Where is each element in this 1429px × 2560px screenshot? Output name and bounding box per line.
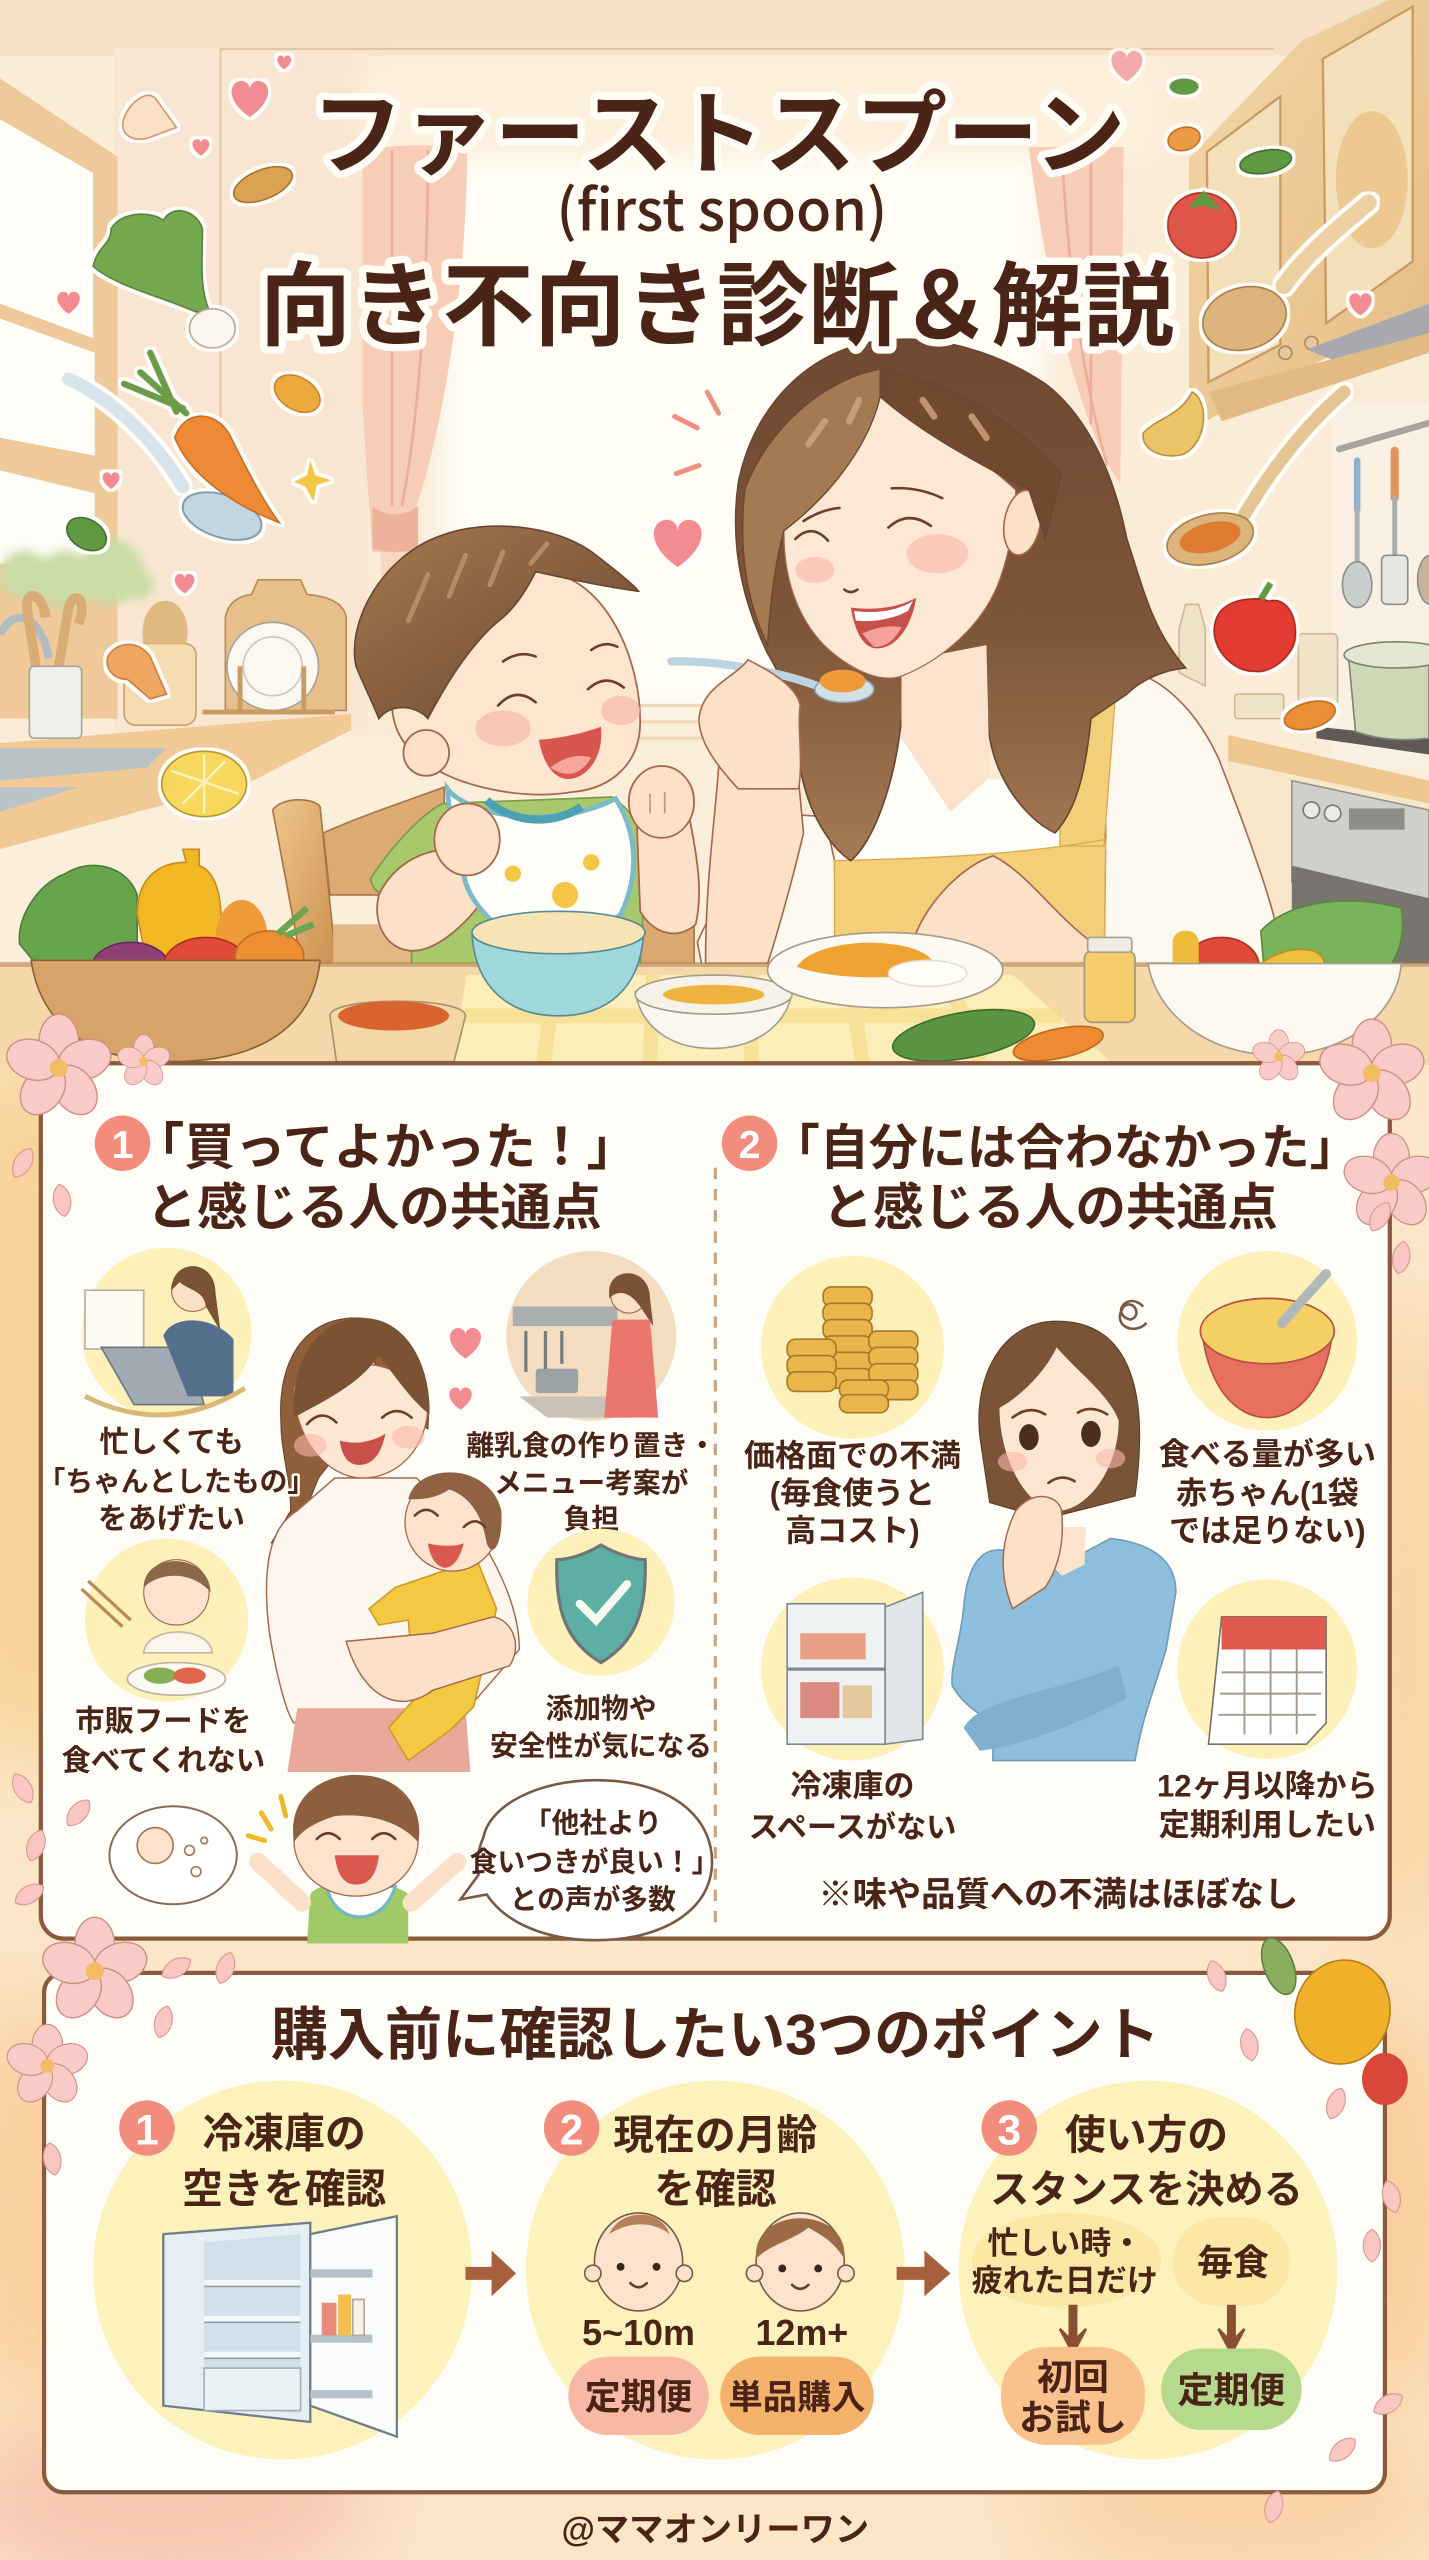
- speech bubble: 「他社より: [524, 1807, 662, 1838]
- baby body: [371, 766, 699, 967]
- mother face: [743, 369, 1062, 678]
- title line: 向き不向き診断＆解説: 向き不向き診断＆解説: [260, 256, 1174, 358]
- item: busy parent: 「ちゃんとしたもの」: [38, 1466, 315, 1497]
- hearts: [449, 1328, 481, 1410]
- item: freezer space: スペースがない: [749, 1809, 956, 1844]
- illustration: mother holding baby: [266, 1318, 519, 1772]
- title line: ファーストスプーン: ファーストスプーン: [312, 85, 1125, 187]
- step badge: [982, 2100, 1037, 2156]
- item: meal prep burden: [466, 1251, 716, 1535]
- panel: common traits: [38, 1063, 1390, 1943]
- panel: three points: [44, 1973, 1385, 2492]
- item: calendar: 12ヶ月以降から: [1157, 1768, 1378, 1803]
- floating foods and spoons: [57, 51, 1372, 817]
- mother skirt: [287, 1708, 470, 1772]
- step circle: [93, 2081, 472, 2460]
- step 2: [526, 2081, 905, 2460]
- item: meal prep burden: メニュー考案が: [494, 1468, 689, 1499]
- footer handle: @ママオンリーワン: [561, 2511, 869, 2549]
- icon: open fridge: [163, 2216, 397, 2437]
- icon: green bean: [61, 511, 112, 557]
- counter jars: [27, 596, 196, 738]
- baby head: [354, 526, 640, 795]
- speech bubble: 食いつきが良い！」: [470, 1847, 719, 1878]
- arrow down left: [1060, 2306, 1086, 2353]
- item: calendar: 定期利用したい: [1159, 1808, 1376, 1843]
- item: busy parent: [38, 1248, 315, 1536]
- item: busy parent: 忙しくても: [99, 1426, 244, 1459]
- icon: star sparkle: [294, 461, 332, 501]
- item: price: (毎食使うと: [770, 1476, 935, 1511]
- icon: sprig shape: [123, 95, 176, 139]
- kitchen illustration: [0, 0, 1429, 1070]
- outcome: subscription: 定期便: [1178, 2369, 1285, 2410]
- step badge: [544, 2100, 599, 2156]
- mother apron: [835, 661, 1117, 967]
- step heading: 空きを確認: [182, 2166, 386, 2212]
- icon: sparkle marks: [674, 392, 719, 474]
- icon: wooden spoon one: [1195, 203, 1369, 359]
- woman face: [998, 1347, 1125, 1576]
- woman crossed arm: [964, 1666, 1127, 1751]
- shelf items right: [1179, 604, 1429, 980]
- mother: [671, 339, 1282, 967]
- arrow step 1 to 2: [465, 2250, 516, 2296]
- held baby: [369, 1472, 502, 1761]
- step heading: 使い方の: [1065, 2112, 1228, 2158]
- hanging utensils: [1339, 423, 1429, 608]
- item: calendar: [1157, 1579, 1378, 1843]
- item: price: [744, 1256, 961, 1549]
- pill: single purchase: [720, 2357, 874, 2435]
- heading: と感じる人の共通点: [822, 1179, 1278, 1236]
- age labels: [582, 2312, 848, 2353]
- item: freezer space: 冷凍庫の: [790, 1768, 915, 1803]
- icon: potato: [229, 159, 297, 210]
- outcome: trial: [1001, 2347, 1145, 2445]
- speech bubble: との声が多数: [510, 1884, 676, 1915]
- step heading: スタンスを決める: [990, 2169, 1303, 2212]
- cutting board and plate rack: [203, 580, 346, 712]
- icon: orange chunk: [1281, 696, 1338, 735]
- icon: radish: [93, 211, 235, 348]
- heading: 「買ってよかった！」: [134, 1118, 637, 1175]
- step badge: [119, 2100, 175, 2156]
- option: busy days: 疲れた日だけ: [972, 2263, 1158, 2298]
- item: price: 価格面での不満: [744, 1439, 961, 1474]
- heading: と感じる人の共通点: [146, 1179, 602, 1236]
- step 1: [93, 2081, 472, 2460]
- option: busy days: [972, 2213, 1161, 2308]
- option: busy days: 忙しい時・: [987, 2226, 1142, 2261]
- heading: [771, 1121, 1359, 1236]
- woman hand at chin: [1003, 1497, 1062, 1609]
- mother second hand: [916, 856, 1127, 967]
- left column: happy buyers: [38, 1115, 719, 1943]
- number badge 1: 1: [112, 1124, 133, 1167]
- potted herbs: [0, 539, 154, 609]
- icon: blue spoon: [69, 379, 267, 549]
- note: ※味や品質への不満はほぼなし: [818, 1876, 1298, 1914]
- icon: leaf: [1238, 146, 1293, 178]
- icon: green sprig: [1169, 78, 1199, 95]
- step 3: [959, 2081, 1338, 2460]
- icon: young baby face: [585, 2213, 692, 2311]
- item: large appetite: 赤ちゃん(1袋: [1176, 1476, 1359, 1511]
- mother arm: [346, 1617, 515, 1701]
- woman hair: [979, 1321, 1140, 1519]
- right column: not a fit: [722, 1115, 1378, 1914]
- item: meal prep burden: 離乳食の作り置き・: [466, 1430, 716, 1461]
- flowers: [1, 1014, 1429, 2109]
- item: safety shield: 安全性が気になる: [490, 1731, 712, 1762]
- step heading: [182, 2111, 386, 2212]
- icon: lemon: [162, 751, 247, 817]
- option: every meal: [1173, 2218, 1290, 2306]
- mother body: [266, 1478, 519, 1723]
- curry plate: [768, 933, 1003, 1008]
- step badge: 3: [997, 2106, 1021, 2153]
- icon: tomato: [1362, 2053, 1408, 2105]
- icon: wooden spoon two: [1161, 392, 1344, 573]
- thought bubble: [109, 1806, 237, 1904]
- left vegetable bowl: [19, 849, 320, 1062]
- left counter and sink: [0, 618, 351, 967]
- icon: carrot: [124, 353, 279, 523]
- speech bubble: [461, 1780, 719, 1940]
- age labels: 12m+: [755, 2312, 848, 2353]
- item: busy parent: をあげたい: [98, 1503, 245, 1536]
- icon: older baby face: [746, 2213, 854, 2311]
- number badge 2: [722, 1115, 777, 1171]
- panel heading: 購入前に確認したい3つのポイント: [271, 2004, 1160, 2068]
- mother arm, hand and spoon: [671, 660, 874, 964]
- heading: [134, 1118, 637, 1236]
- mother hair: [271, 1318, 428, 1543]
- pill: subscription: 定期便: [585, 2376, 693, 2417]
- item: refuses store food: 食べてくれない: [62, 1744, 265, 1777]
- icon: mango: [1255, 1934, 1402, 2075]
- step badge: 2: [560, 2106, 583, 2153]
- title line: first spoon: (first spoon): [556, 165, 887, 247]
- step heading: 冷凍庫の: [203, 2111, 366, 2157]
- happy baby: [248, 1775, 457, 1943]
- table: [0, 962, 1429, 1065]
- mother face: [294, 1318, 430, 1478]
- item: refuses store food: 市販フードを: [75, 1705, 251, 1738]
- step badge: 1: [135, 2106, 159, 2153]
- jar: [1084, 937, 1135, 1022]
- title: [260, 85, 1174, 358]
- right cabinets: [1189, 0, 1429, 769]
- pill: single purchase: 単品購入: [728, 2379, 866, 2417]
- item: freezer space: [749, 1578, 956, 1844]
- number badge 2: 2: [739, 1124, 761, 1167]
- step heading: [613, 2112, 818, 2212]
- panel background: [44, 1973, 1385, 2492]
- baby in high chair: [354, 526, 699, 967]
- icon: floating hearts: [57, 51, 1372, 593]
- outcome: subscription: [1161, 2348, 1302, 2430]
- corner flowers and petals: [1, 1014, 1429, 2525]
- number badge 1: [95, 1115, 150, 1171]
- icon: small carrot: [1165, 124, 1203, 154]
- item: large appetite: では足りない): [1169, 1514, 1366, 1549]
- item: large appetite: [1159, 1251, 1376, 1549]
- icon: drumstick: [107, 644, 167, 699]
- kitchen wall and window: [0, 0, 1429, 1065]
- outcome: trial: お試し: [1019, 2397, 1127, 2438]
- pill: subscription: [568, 2357, 709, 2435]
- right vegetable bowl: [1148, 901, 1403, 1055]
- step heading: を確認: [654, 2166, 777, 2212]
- item: safety shield: [490, 1529, 712, 1762]
- heading: 「自分には合わなかった」: [771, 1121, 1359, 1175]
- option: every meal: 毎食: [1197, 2242, 1269, 2283]
- wooden high chair: [273, 787, 694, 967]
- petals: [7, 1144, 1413, 2525]
- mother white top and sleeves: [697, 668, 1282, 967]
- icon: potato chunk: [1143, 392, 1204, 456]
- age labels: 5~10m: [582, 2312, 695, 2353]
- illustration: worried woman: [952, 1301, 1176, 1761]
- woman body: [952, 1538, 1176, 1761]
- mother neck: [901, 645, 990, 812]
- item: safety shield: 添加物や: [545, 1693, 657, 1724]
- left window: [0, 78, 118, 719]
- step circle: [959, 2081, 1338, 2460]
- arrow down right: [1218, 2306, 1244, 2353]
- item: refuses store food: [62, 1538, 265, 1777]
- icon: tomato: [1168, 193, 1236, 258]
- item: meal prep burden: 負担: [563, 1504, 619, 1535]
- mother long hair: [736, 339, 1186, 861]
- divider: [714, 1168, 716, 1930]
- stove and pot: [1292, 642, 1429, 967]
- panel background: [41, 1063, 1390, 1939]
- step circle: [526, 2081, 905, 2460]
- table vegetables: [889, 1000, 1106, 1070]
- baby food bowls: [330, 911, 792, 1062]
- icon: bean: [268, 367, 327, 420]
- step heading: [990, 2112, 1303, 2212]
- squiggle: [1120, 1301, 1146, 1329]
- arrow step 2 to 3: [897, 2250, 950, 2296]
- item: price: 高コスト): [785, 1514, 920, 1549]
- item: large appetite: 食べる量が多い: [1159, 1437, 1376, 1472]
- icon: red pepper: [1214, 583, 1296, 672]
- outcome: trial: 初回: [1037, 2356, 1109, 2397]
- step heading: 現在の月齢: [613, 2112, 818, 2158]
